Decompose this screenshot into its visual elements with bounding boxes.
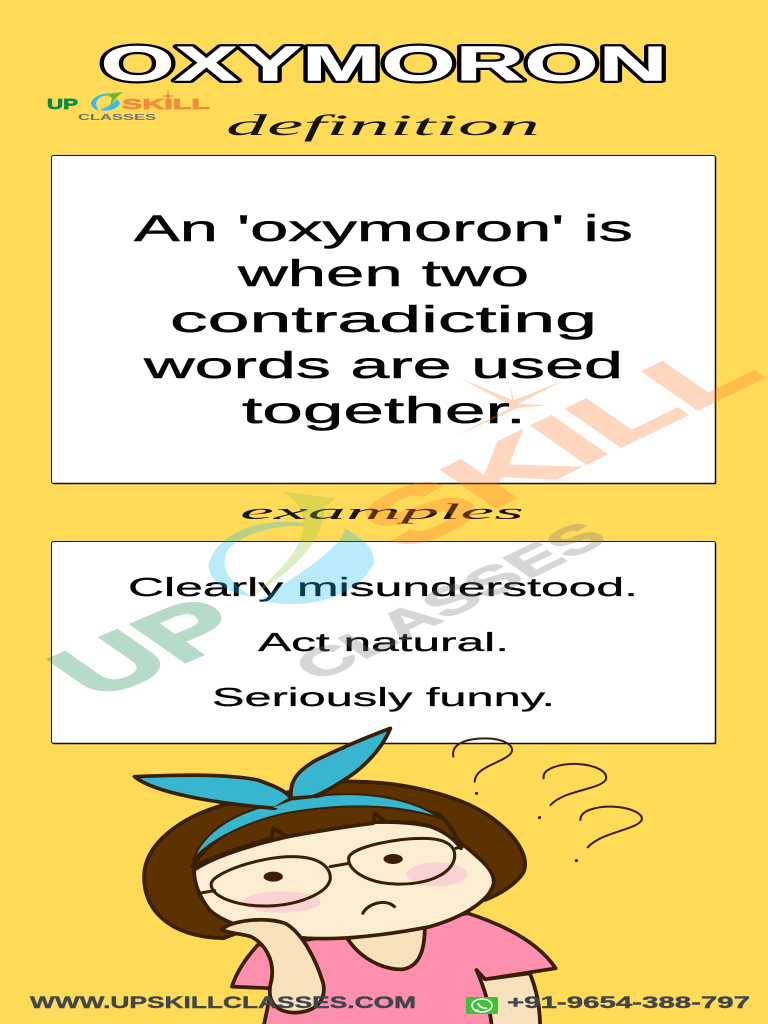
heading: examples: examples: [240, 499, 524, 524]
examples text: Act natural.: [258, 627, 509, 657]
title: [100, 38, 668, 92]
logo: upskill classes: UP: [47, 96, 78, 113]
mouth: [363, 902, 394, 913]
right arm: [476, 970, 540, 1024]
examples text: Clearly misunderstood.: [128, 572, 638, 602]
title: OXYMORON: [100, 38, 668, 92]
watermark: upskill classes logo: CLASSES: [281, 513, 619, 688]
definition text: together.: [242, 390, 526, 431]
headband: [193, 794, 440, 860]
bangs: [192, 803, 461, 867]
definition text: [134, 208, 633, 431]
logo: upskill classes: SKILL: [122, 96, 210, 113]
heading: definition: definition: [226, 109, 540, 142]
eyes: [264, 872, 283, 882]
shirt: [232, 913, 556, 1024]
bow: [134, 728, 390, 811]
hand: [222, 920, 324, 1013]
icon: whatsapp: [466, 997, 498, 1014]
logo: upskill classes: [47, 89, 210, 122]
examples text: [128, 572, 638, 712]
watermark: upskill classes logo: UP: [24, 583, 271, 712]
title: OXYMORON: [100, 38, 668, 92]
logo: upskill classes: CLASSES: [78, 113, 157, 122]
panel: examples: [52, 542, 716, 744]
question marks: [453, 738, 642, 861]
footer: website: WWW.UPSKILLCLASSES.COM: [30, 993, 416, 1012]
definition text: when two: [236, 253, 529, 294]
definition text: An 'oxymoron' is: [134, 208, 633, 249]
illustration: thinking girl: [134, 728, 642, 1024]
watermark: upskill classes logo: [24, 326, 768, 712]
watermark: upskill classes logo: SKILL: [333, 326, 768, 564]
face: [194, 822, 494, 939]
panel: definition: [52, 156, 716, 484]
neck: [347, 927, 425, 969]
footer: phone: +91-9654-388-797: [507, 993, 750, 1012]
hair back: [144, 782, 525, 938]
glasses: [199, 838, 464, 906]
examples text: Seriously funny.: [212, 682, 555, 712]
definition text: words are used: [142, 345, 623, 386]
definition text: contradicting: [170, 299, 597, 340]
cheeks: [243, 891, 320, 913]
